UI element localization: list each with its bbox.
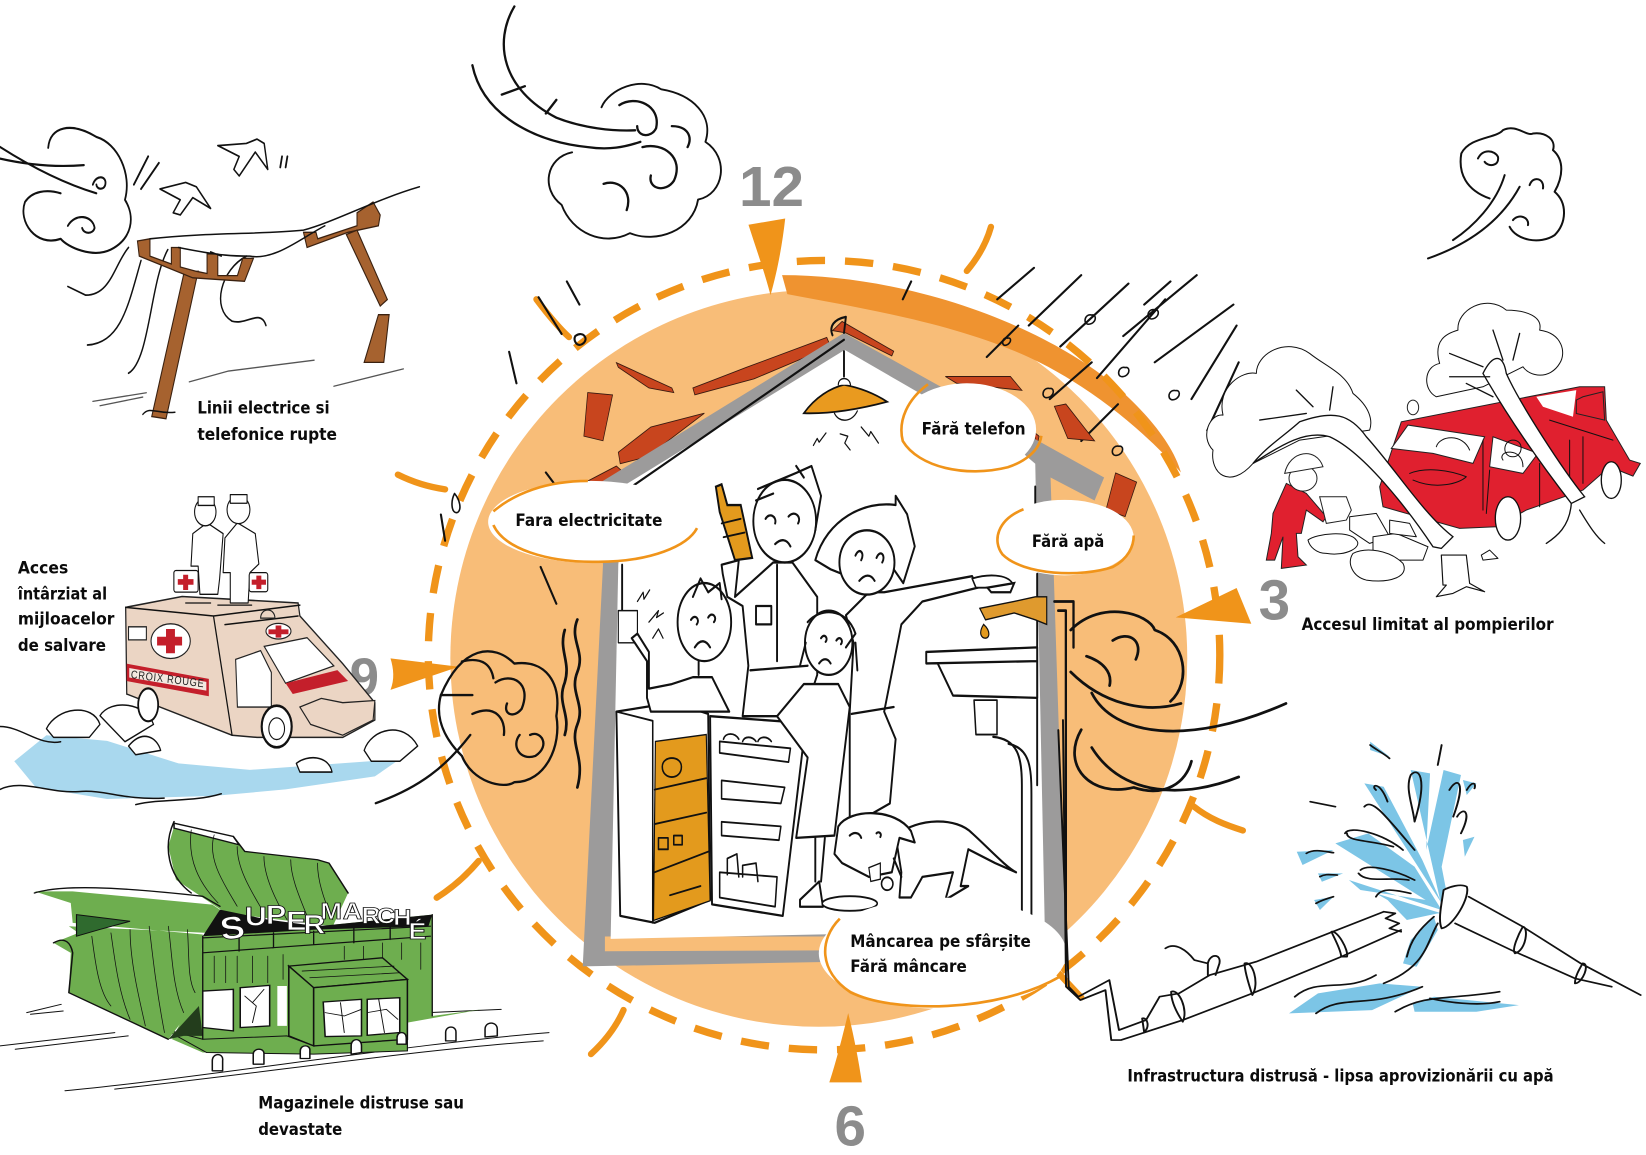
supermarket sign: R	[361, 903, 381, 929]
rocks	[46, 705, 418, 772]
house interior	[611, 350, 1045, 939]
clock mark 9	[350, 648, 459, 707]
truck body	[1380, 387, 1640, 528]
facade bands	[203, 915, 432, 1039]
fallen trunks	[1253, 415, 1453, 548]
callout: no water	[995, 500, 1134, 575]
clock mark 3: 3	[1259, 569, 1290, 632]
refrigerator	[616, 702, 806, 923]
tree crowns	[1207, 303, 1563, 477]
wind cloud right of house	[1071, 612, 1286, 791]
father with phone	[716, 466, 821, 716]
wind cloud left of house	[376, 619, 580, 803]
label: power lines: Linii electrice si	[197, 398, 330, 418]
supermarket sign: H	[393, 906, 411, 930]
boy	[632, 578, 731, 712]
vehicle body	[126, 596, 375, 737]
callout: food running out	[819, 898, 1067, 1009]
label: rescue access: Acces	[18, 557, 68, 577]
label: power lines: telefonice rupte	[197, 424, 337, 444]
truck wheels	[1495, 497, 1521, 540]
clock mark 3	[1176, 569, 1290, 632]
supermarket sign: M	[321, 899, 342, 924]
label: rescue access: de salvare	[18, 635, 106, 655]
doctors	[174, 495, 268, 605]
mother	[815, 496, 1012, 826]
wind cloud	[0, 128, 287, 373]
water splash	[1289, 742, 1519, 1013]
illustration: fire truck blocked by fallen trees	[1207, 303, 1640, 597]
sink, tap and pipes	[926, 583, 1074, 923]
callout: food running out: Fără mâncare	[850, 956, 967, 976]
tree stump	[1436, 555, 1485, 597]
side stripe	[127, 664, 209, 696]
splash strokes	[1295, 745, 1500, 1013]
dog	[822, 813, 1016, 911]
supermarket sign: C	[377, 905, 395, 929]
light switch	[618, 611, 637, 643]
house walls	[583, 333, 1104, 966]
label: rescue access: mijloacelor	[18, 609, 115, 629]
illustration: storm wind top centre	[472, 6, 721, 239]
callout: no phone: Fără telefon	[922, 419, 1026, 439]
supermarket sign: É	[409, 918, 426, 944]
orange background disc	[450, 275, 1226, 1027]
ground shading	[0, 1004, 549, 1091]
illustration: wind cloud top right	[1428, 128, 1564, 258]
clock mark 6	[829, 1013, 866, 1155]
left pipe run	[1058, 720, 1401, 1040]
red cross signs	[151, 624, 190, 658]
label: shops	[258, 1093, 464, 1139]
illustration: ambulance	[0, 495, 418, 805]
label: rescue access	[17, 557, 115, 655]
corrugated metal lines	[92, 830, 421, 1033]
callout: no electricity: Fara electricitate	[515, 510, 662, 530]
label: shops: Magazinele distruse sau	[258, 1093, 464, 1113]
label: firefighters: Accesul limitat al pompierilor	[1302, 614, 1554, 634]
wires and ground	[93, 187, 419, 414]
supermarket sign: P	[266, 901, 286, 931]
rain streaks	[441, 268, 1239, 604]
clock mark 12	[739, 156, 804, 295]
clock mark 9: 9	[350, 648, 379, 707]
label: power lines	[197, 398, 337, 444]
flood water	[14, 735, 400, 799]
illustration: broken power lines	[0, 128, 419, 419]
roof gap	[203, 910, 432, 936]
supermarket sign: E	[286, 907, 307, 937]
bottom wall strip	[605, 937, 1049, 951]
supermarket sign: S	[217, 910, 247, 948]
dashed clock ring	[428, 260, 1220, 1050]
power poles	[137, 202, 389, 419]
green building	[172, 915, 482, 1053]
supermarket sign: U	[245, 902, 267, 932]
supermarket sign: A	[343, 899, 362, 924]
callout: no electricity	[488, 481, 697, 563]
supermarket sign	[217, 899, 426, 948]
firemen in cab	[1436, 438, 1523, 467]
label: shops: devastate	[258, 1119, 342, 1139]
illustration: burst water pipe	[1058, 720, 1641, 1040]
illustration: damaged supermarket	[0, 822, 549, 1091]
house and family scene	[583, 317, 1137, 966]
rocks	[1308, 513, 1498, 581]
fireman	[1266, 454, 1351, 568]
label: water infrastructure: Infrastructura distrusă - lipsa aprovizionării cu apă	[1127, 1065, 1554, 1085]
parking bollards	[212, 1023, 497, 1071]
girl	[777, 611, 857, 907]
wheels	[138, 688, 158, 721]
clock mark 12: 12	[739, 156, 804, 219]
sun rays around the ring	[398, 227, 1243, 1054]
roof tiles	[584, 321, 1137, 517]
supermarket sign: R	[303, 910, 326, 940]
birds	[160, 139, 268, 215]
callout: no water: Fără apă	[1032, 531, 1104, 551]
callout: no phone	[898, 383, 1041, 476]
right pipe run	[1440, 885, 1641, 995]
illustration: ambulance: CROIX ROUGE	[130, 669, 204, 691]
entrance porch	[289, 958, 407, 988]
callout: food running out: Mâncarea pe sfârșite	[850, 931, 1031, 951]
label: rescue access: întârziat al	[17, 584, 107, 604]
ceiling lamp	[804, 379, 887, 450]
broken windows	[203, 989, 233, 1031]
